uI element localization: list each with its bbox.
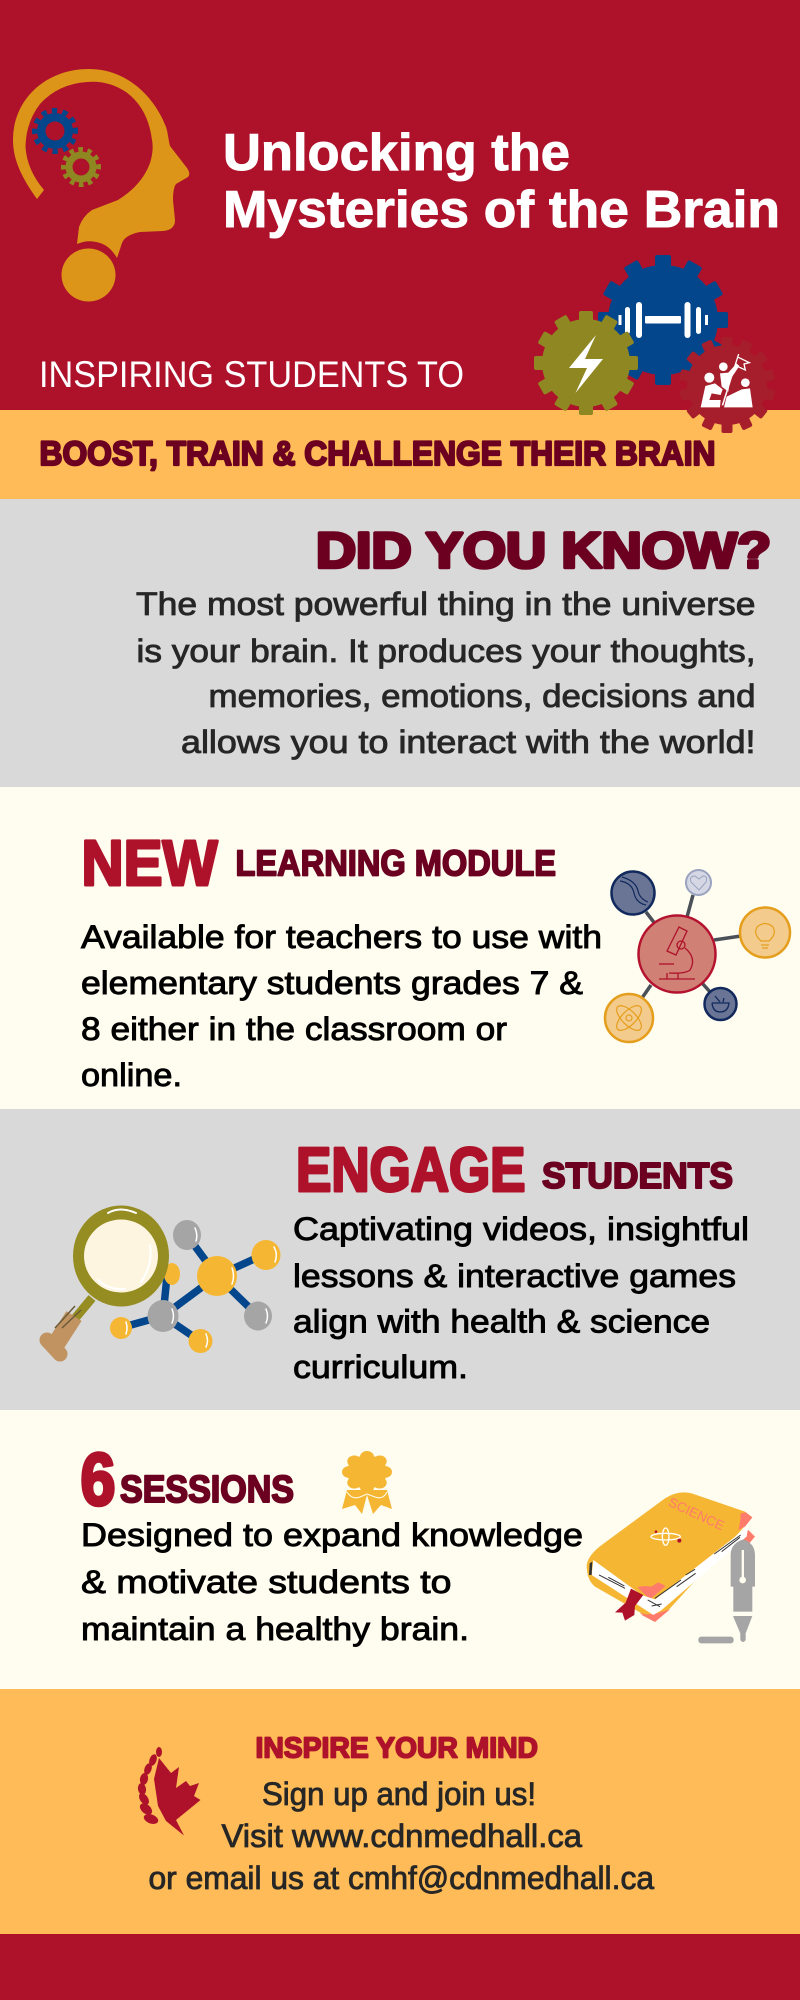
text block <box>148 1776 654 1896</box>
panel: did you know <box>0 499 800 787</box>
panel: new learning module <box>0 787 800 1109</box>
text block: memories, emotions, decisions and <box>208 678 756 714</box>
title <box>223 124 780 239</box>
text block: & motivate students to <box>81 1564 452 1600</box>
text block <box>293 1211 749 1385</box>
text block <box>136 586 756 760</box>
heading: DID YOU KNOW? <box>316 522 771 578</box>
text block: lessons & interactive games <box>293 1258 736 1294</box>
text block: or email us at cmhf@cdnmedhall.ca <box>148 1860 654 1896</box>
icon: award rosette <box>342 1451 392 1514</box>
icon: red gear with teamwork figures <box>679 337 775 433</box>
heading: sessions: SESSIONS <box>120 1469 294 1511</box>
text block: align with health & science <box>293 1304 710 1340</box>
subtitle: INSPIRING STUDENTS TO <box>39 354 464 395</box>
text block: 8 either in the classroom or <box>81 1011 507 1047</box>
text block: The most powerful thing in the universe <box>136 586 756 622</box>
icon: science network <box>605 870 790 1042</box>
panel: header <box>0 0 800 499</box>
heading: six: 6 <box>80 1438 116 1521</box>
text block: online. <box>81 1057 182 1093</box>
icon: science book and pen: SCIENCE <box>666 1494 727 1533</box>
text block: Available for teachers to use with <box>81 919 602 955</box>
heading: new: NEW <box>82 827 218 899</box>
icon: olive gear with lightning bolt <box>534 311 638 415</box>
text block: is your brain. It produces your thoughts, <box>136 633 756 669</box>
icon: magnifying glass <box>47 1206 169 1354</box>
heading: engage: ENGAGE <box>296 1136 526 1205</box>
banner heading: BOOST, TRAIN & CHALLENGE THEIR BRAIN <box>40 435 716 473</box>
text block: Sign up and join us! <box>262 1776 536 1812</box>
text block <box>81 1517 583 1647</box>
heading: INSPIRE YOUR MIND <box>256 1732 538 1764</box>
title: Unlocking the <box>223 124 570 182</box>
text block: Captivating videos, insightful <box>293 1211 749 1247</box>
panel: footer bar <box>0 1934 800 2000</box>
text block: Designed to expand knowledge <box>81 1517 583 1553</box>
text block <box>81 919 602 1093</box>
text block: allows you to interact with the world! <box>181 724 756 760</box>
text block: curriculum. <box>293 1349 468 1385</box>
panel: six sessions <box>0 1410 800 1689</box>
heading: learning module: LEARNING MODULE <box>236 842 556 884</box>
icon: science book and pen <box>587 1492 755 1643</box>
panel: call to action <box>0 1689 800 1934</box>
heading: students: STUDENTS <box>542 1155 733 1196</box>
text block: elementary students grades 7 & <box>81 965 583 1001</box>
text block: maintain a healthy brain. <box>81 1611 469 1647</box>
icon: molecule <box>110 1220 280 1353</box>
title: Mysteries of the Brain <box>223 181 780 239</box>
icon: head with gears <box>13 69 189 302</box>
text block: Visit www.cdnmedhall.ca <box>222 1818 582 1854</box>
panel: engage students <box>0 1109 800 1410</box>
icon: blue gear with dumbbell <box>598 255 728 385</box>
icon: maple leaf <box>137 1747 200 1836</box>
